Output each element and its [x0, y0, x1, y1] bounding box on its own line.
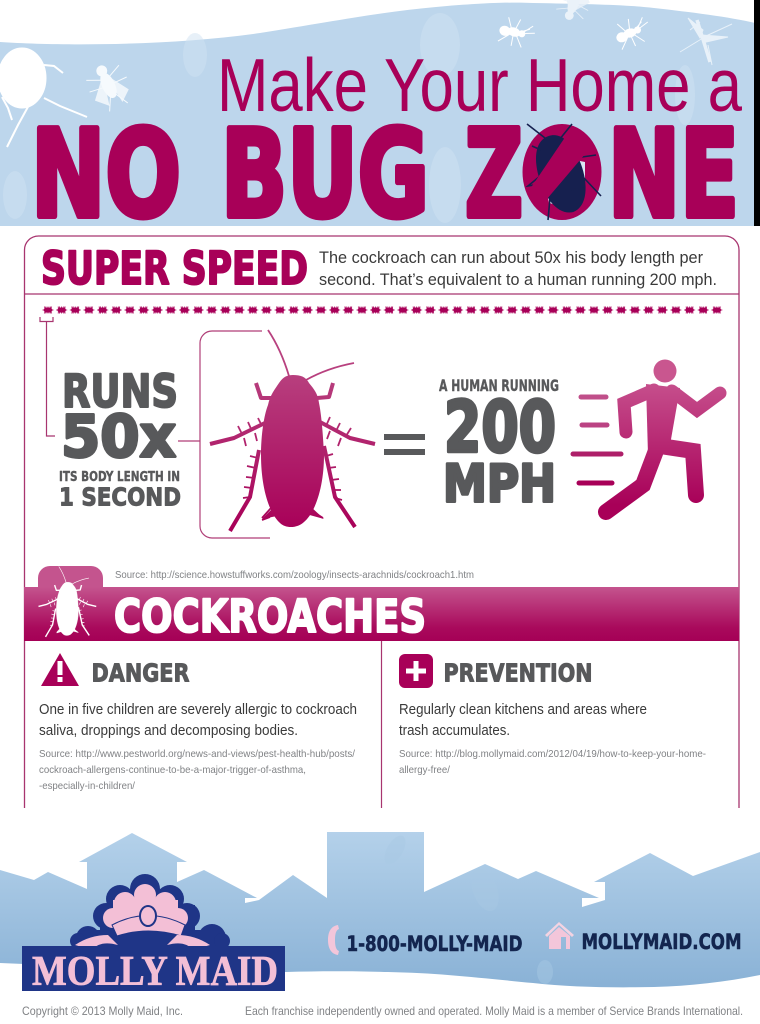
roach bracket: [178, 331, 270, 538]
heading: danger: DANGER: [92, 658, 190, 688]
stat text: runs 50x: [59, 365, 181, 512]
faint footer bugs: [380, 832, 553, 984]
heading: prevention: PREVENTION: [444, 658, 592, 688]
title: no: NO: [31, 106, 181, 245]
neighbourhood skyline: [0, 832, 760, 987]
icon: prevention: [399, 654, 433, 688]
stat text: runs 50x: 50x: [61, 402, 176, 470]
stat text: 200 mph: 200: [444, 386, 556, 468]
stat text: runs 50x: ITS BODY LENGTH IN: [59, 470, 180, 485]
panel outline: [24, 236, 739, 808]
danger source: Source: http://www.pestworld.org/news-and-views/pest-health-hub/posts/: [39, 748, 355, 760]
phone number: 1-800-MOLLY-MAID: [346, 932, 522, 957]
panel: cockroaches: [24, 566, 739, 808]
stat text: 200 mph: MPH: [443, 454, 556, 514]
stat text: 200 mph: [439, 376, 559, 514]
speed lines: [573, 397, 621, 483]
heading: super speed: SUPER SPEED: [41, 242, 308, 295]
navy crown: [70, 874, 230, 952]
header banner: [0, 0, 760, 245]
fly: [82, 58, 137, 116]
intro text: The cockroach can run about 50x his body length per: [319, 248, 703, 267]
banner: [24, 587, 739, 641]
icon: danger: [41, 653, 79, 686]
large white roach silhouette: [0, 48, 87, 147]
prevention source: [399, 748, 706, 776]
title: bug: BUG: [221, 106, 429, 245]
equals sign: [384, 434, 425, 455]
danger text: One in five children are severely allergic to cockroach: [39, 702, 357, 718]
ant one: [496, 14, 538, 52]
intro text: second. That’s equivalent to a human running 200 mph.: [319, 270, 717, 289]
black edge strip: [754, 0, 760, 226]
title: z: Z: [465, 106, 523, 245]
body-length bracket: [40, 317, 55, 436]
column divider: [380, 641, 382, 808]
danger text: [39, 702, 357, 739]
running figure: [606, 360, 720, 512]
prevention text: Regularly clean kitchens and areas where: [399, 702, 647, 718]
danger source: cockroach-allergens-continue-to-be-a-major-trigger-of-asthma,: [39, 764, 306, 776]
footer: [0, 832, 760, 1018]
icon: phone: [328, 925, 339, 955]
no-bug symbol: [522, 124, 602, 220]
tab: [38, 566, 103, 588]
top fly: [553, 0, 595, 25]
copyright: Copyright © 2013 Molly Maid, Inc.: [22, 1004, 183, 1018]
panel: super speed: [24, 236, 739, 808]
prevention text: [399, 702, 647, 739]
prevention source: allergy-free/: [399, 764, 450, 776]
prevention source: Source: http://blog.mollymaid.com/2012/04/19/how-to-keep-your-home-: [399, 748, 706, 760]
white roach icon: [39, 566, 96, 637]
icon: house: [545, 922, 574, 949]
ant two: [613, 14, 653, 50]
stat text: runs 50x: RUNS: [62, 365, 178, 418]
intro text: [319, 248, 717, 289]
molly maid logo: [22, 874, 285, 995]
navy banner: [22, 946, 285, 991]
danger source: [39, 748, 355, 792]
pink crown: [75, 884, 210, 950]
heading: cockroaches: COCKROACHES: [114, 590, 426, 643]
stat text: runs 50x: 1 SECOND: [59, 482, 181, 512]
danger source: -especially-in-children/: [39, 780, 135, 792]
stat text: 200 mph: A HUMAN RUNNING: [439, 376, 559, 395]
header sky wave: [0, 3, 755, 226]
crown jewel: [140, 906, 156, 926]
cockroach illustration: [210, 330, 375, 531]
row of tiny roaches: [42, 304, 725, 316]
mosquito: [680, 18, 732, 65]
prevention text: trash accumulates.: [399, 723, 510, 739]
faint background bugs: [3, 13, 695, 223]
source line: Source: http://science.howstuffworks.com/zoology/insects-arachnids/cockroach1.htm: [115, 569, 474, 581]
logo wordmark: MOLLY MAID: [32, 949, 278, 995]
danger text: saliva, droppings and decomposing bodies.: [39, 723, 298, 739]
